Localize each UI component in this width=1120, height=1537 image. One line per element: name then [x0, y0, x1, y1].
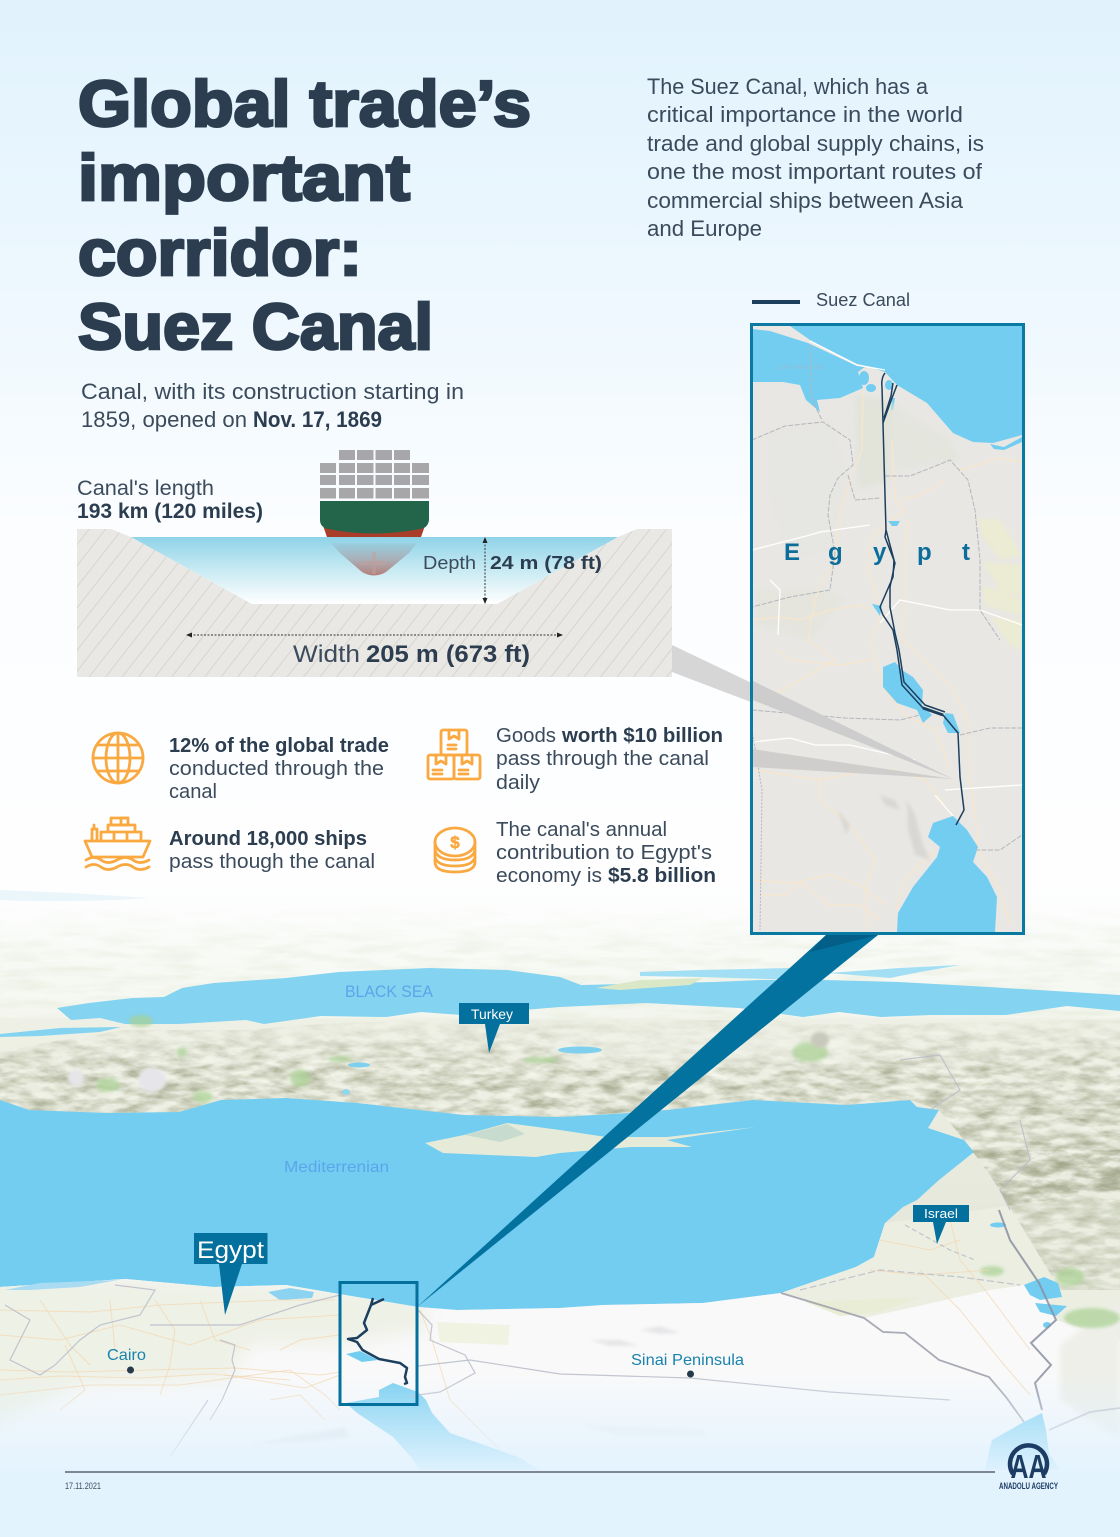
title [78, 67, 531, 363]
Egypt label: y [873, 539, 887, 566]
Egypt label: t [962, 539, 970, 566]
width measure: Width [293, 641, 360, 668]
intro text block [647, 74, 984, 241]
icon: coins [435, 828, 475, 872]
tag: Egypt: Egypt [197, 1237, 264, 1264]
canal length: 193 km (120 miles) [77, 500, 263, 523]
gulfs [346, 1383, 540, 1470]
Egypt label [784, 539, 970, 566]
tag: Israel: Israel [924, 1206, 958, 1221]
Anadolu Agency logo: ANADOLU AGENCY [999, 1481, 1058, 1491]
grey connector to inset [672, 645, 953, 779]
green patches and rock [96, 1015, 1120, 1328]
stat: economy: The canal's annual [496, 819, 667, 841]
grey connectors inside inset [745, 677, 953, 779]
panel: inset map of the canal [745, 324, 1024, 935]
tag: Turkey: Turkey [471, 1006, 513, 1022]
stat: goods [428, 725, 723, 794]
label: Sinai Peninsula [631, 1352, 744, 1378]
legend: Suez Canal: Suez Canal [816, 290, 910, 310]
water [131, 537, 618, 604]
construction note [81, 379, 464, 432]
intro text block: one the most important routes of [647, 159, 983, 184]
date: 17.11.2021 [65, 1481, 101, 1491]
stat: economy [435, 819, 716, 887]
Egypt label: p [917, 539, 932, 566]
panel: inset map of the canal: Lake Manzala [777, 362, 825, 371]
stat: global trade: conducted through the [169, 758, 384, 780]
stat: goods: daily [496, 772, 540, 794]
construction note: Nov. 17, 1869 [253, 407, 382, 432]
stat: economy: $5.8 billion [608, 865, 716, 887]
label: Sinai Peninsula: Sinai Peninsula [631, 1352, 744, 1369]
depth measure: 24 m (78 ft) [490, 552, 602, 573]
Egypt label: g [828, 539, 843, 566]
title: Global trade’s [78, 67, 531, 140]
title: important [78, 141, 410, 214]
label: Mediterranean: Mediterrenian [284, 1159, 389, 1176]
stat: global trade: canal [169, 781, 217, 803]
title: Suez Canal [78, 290, 433, 363]
footer rule [65, 1471, 995, 1473]
3D terrain map [0, 880, 1120, 1537]
icon: coins: $ [450, 833, 460, 852]
icon: globe [93, 733, 143, 783]
intro text block: trade and global supply chains, is [647, 131, 984, 156]
Anadolu Agency logo [999, 1445, 1058, 1491]
canal route [880, 373, 964, 825]
intro text block: and Europe [647, 216, 762, 241]
depth measure [423, 537, 602, 604]
pointer from locator to inset [417, 935, 878, 1307]
canal length [77, 477, 263, 523]
Cyprus [425, 1123, 756, 1157]
stat: ships: Around 18,000 ships [169, 828, 367, 850]
Egypt label: E [784, 539, 800, 566]
tag: Turkey [459, 1003, 529, 1053]
North Africa land [0, 1223, 1120, 1480]
icon: cargo ship [85, 818, 150, 870]
stat: economy: economy is [496, 865, 602, 887]
intro text block: critical importance in the world [647, 102, 963, 127]
intro text block: commercial ships between Asia [647, 188, 964, 213]
stat: goods: worth $10 billion [561, 725, 723, 747]
tag: Egypt [194, 1233, 268, 1315]
Anadolu Agency logo: AA [1010, 1448, 1046, 1485]
width measure [186, 632, 563, 668]
stat: global trade: 12% of the global trade [169, 735, 389, 757]
stat: goods: Goods [496, 725, 556, 747]
roads and borders [0, 1055, 1120, 1457]
tag: Israel [913, 1205, 969, 1244]
label: Cairo [107, 1347, 146, 1374]
stat: goods: pass through the canal [496, 748, 709, 770]
inset rocky relief [838, 795, 930, 860]
intro text block: The Suez Canal, which has a [647, 74, 929, 99]
inset lakes and gulf [883, 662, 932, 723]
label: Black Sea: BLACK SEA [345, 982, 434, 1001]
stat: global trade [93, 733, 389, 803]
construction note: 1859, opened on [81, 407, 247, 432]
Mediterranean Sea [0, 1098, 974, 1310]
label: Cairo: Cairo [107, 1347, 146, 1364]
construction note: Canal, with its construction starting in [81, 379, 464, 404]
icon: boxes [428, 730, 480, 779]
canal cross-section panel [77, 450, 672, 677]
canal length: Canal's length [77, 477, 214, 500]
lagoons and lakes [5, 1280, 118, 1290]
locator box with canal route [340, 1282, 417, 1404]
container ship [320, 450, 429, 576]
inset farmland [858, 400, 894, 485]
width measure: 205 m (673 ft) [366, 641, 530, 668]
stat: ships: pass though the canal [169, 851, 375, 873]
stat: economy: contribution to Egypt's [496, 842, 712, 864]
Black Sea [57, 968, 1120, 1024]
depth measure: Depth [423, 552, 476, 573]
stat: ships [85, 818, 375, 873]
inset land [753, 367, 1022, 446]
title: corridor: [78, 216, 362, 289]
inset roads [777, 390, 864, 694]
